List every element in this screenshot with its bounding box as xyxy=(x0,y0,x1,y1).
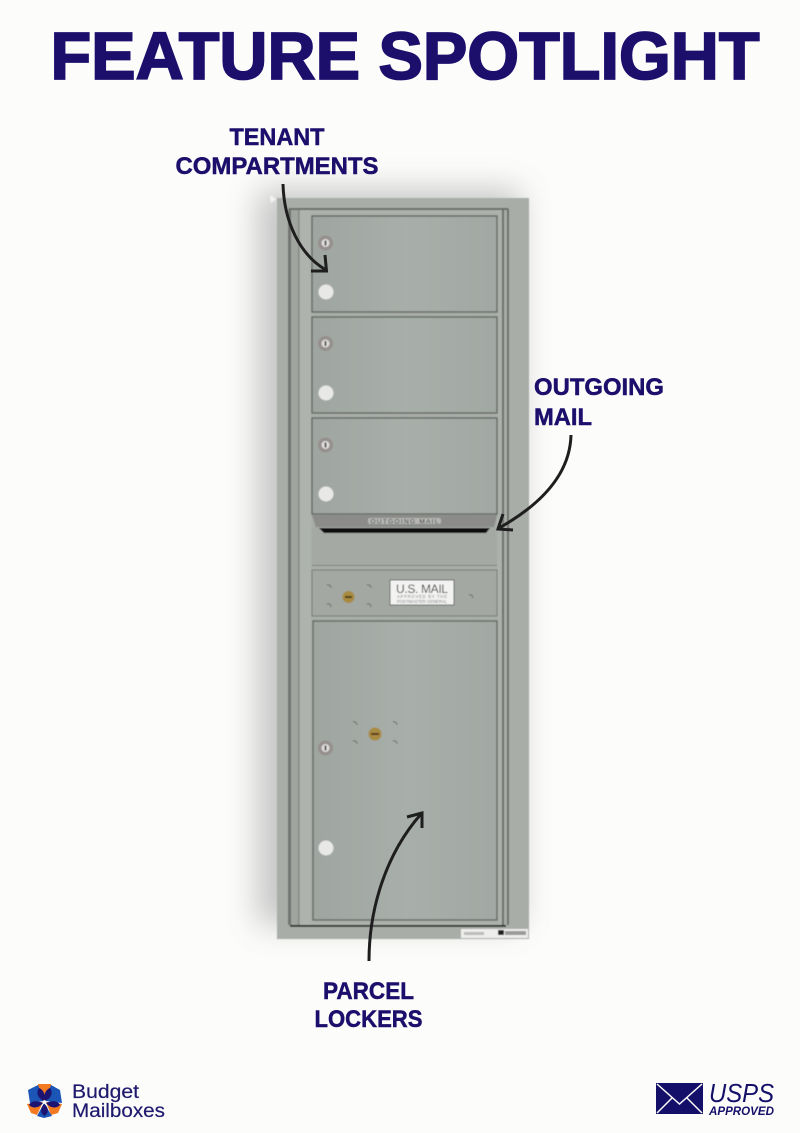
label: outgoing mail xyxy=(534,374,664,431)
mailbox unit xyxy=(270,195,529,939)
label: outgoing mail: MAIL xyxy=(534,404,592,431)
lock 2 xyxy=(318,336,333,351)
arrow: outgoing mail xyxy=(498,435,571,530)
label: parcel lockers: LOCKERS xyxy=(314,1006,422,1033)
U.S. Mail plate: POSTMASTER GENERAL xyxy=(397,599,448,604)
logo: USPS approved xyxy=(656,1078,775,1118)
compartment door 3 xyxy=(312,418,497,514)
button 3 xyxy=(318,486,334,502)
master lock panel xyxy=(312,570,497,616)
icon: envelope xyxy=(656,1083,703,1114)
logo: Budget Mailboxes xyxy=(27,1082,165,1122)
label: tenant compartments: TENANT xyxy=(230,124,325,151)
compliance label xyxy=(461,929,528,938)
label: outgoing mail: OUTGOING xyxy=(534,374,664,401)
cabinet shadow xyxy=(258,190,520,925)
logo wordmark: Mailboxes xyxy=(72,1101,165,1122)
button 1 xyxy=(318,284,334,300)
lock 1 xyxy=(318,236,333,250)
U.S. Mail plate: U.S. MAIL xyxy=(396,582,448,596)
USPS approved wordmark: USPS xyxy=(709,1078,775,1108)
icon: flower mark xyxy=(27,1084,62,1118)
label: parcel lockers xyxy=(314,978,422,1033)
outgoing mail slot: OUTGOING MAIL xyxy=(370,518,439,526)
arrow: parcel lockers xyxy=(369,813,422,961)
lock 3 xyxy=(318,438,333,452)
logo wordmark: Budget xyxy=(72,1082,140,1103)
U.S. Mail plate xyxy=(390,580,454,605)
cabinet frame xyxy=(277,198,529,939)
label: parcel lockers: PARCEL xyxy=(323,978,414,1005)
title: FEATURE SPOTLIGHT xyxy=(50,19,760,94)
button 2 xyxy=(318,386,334,400)
parcel locker door xyxy=(313,621,497,920)
label: tenant compartments: COMPARTMENTS xyxy=(176,153,378,180)
USPS approved wordmark: APPROVED xyxy=(708,1104,774,1118)
logo wordmark xyxy=(72,1082,165,1122)
arrow: tenant compartments xyxy=(283,184,326,271)
U.S. Mail plate: APPROVED BY THE xyxy=(397,594,447,599)
corner nick xyxy=(270,195,276,203)
USPS approved wordmark xyxy=(708,1078,775,1118)
label: tenant compartments xyxy=(176,124,378,180)
compartment door 2 xyxy=(312,317,497,413)
outgoing mail slot xyxy=(312,515,497,566)
compartment door 1 xyxy=(312,216,497,312)
